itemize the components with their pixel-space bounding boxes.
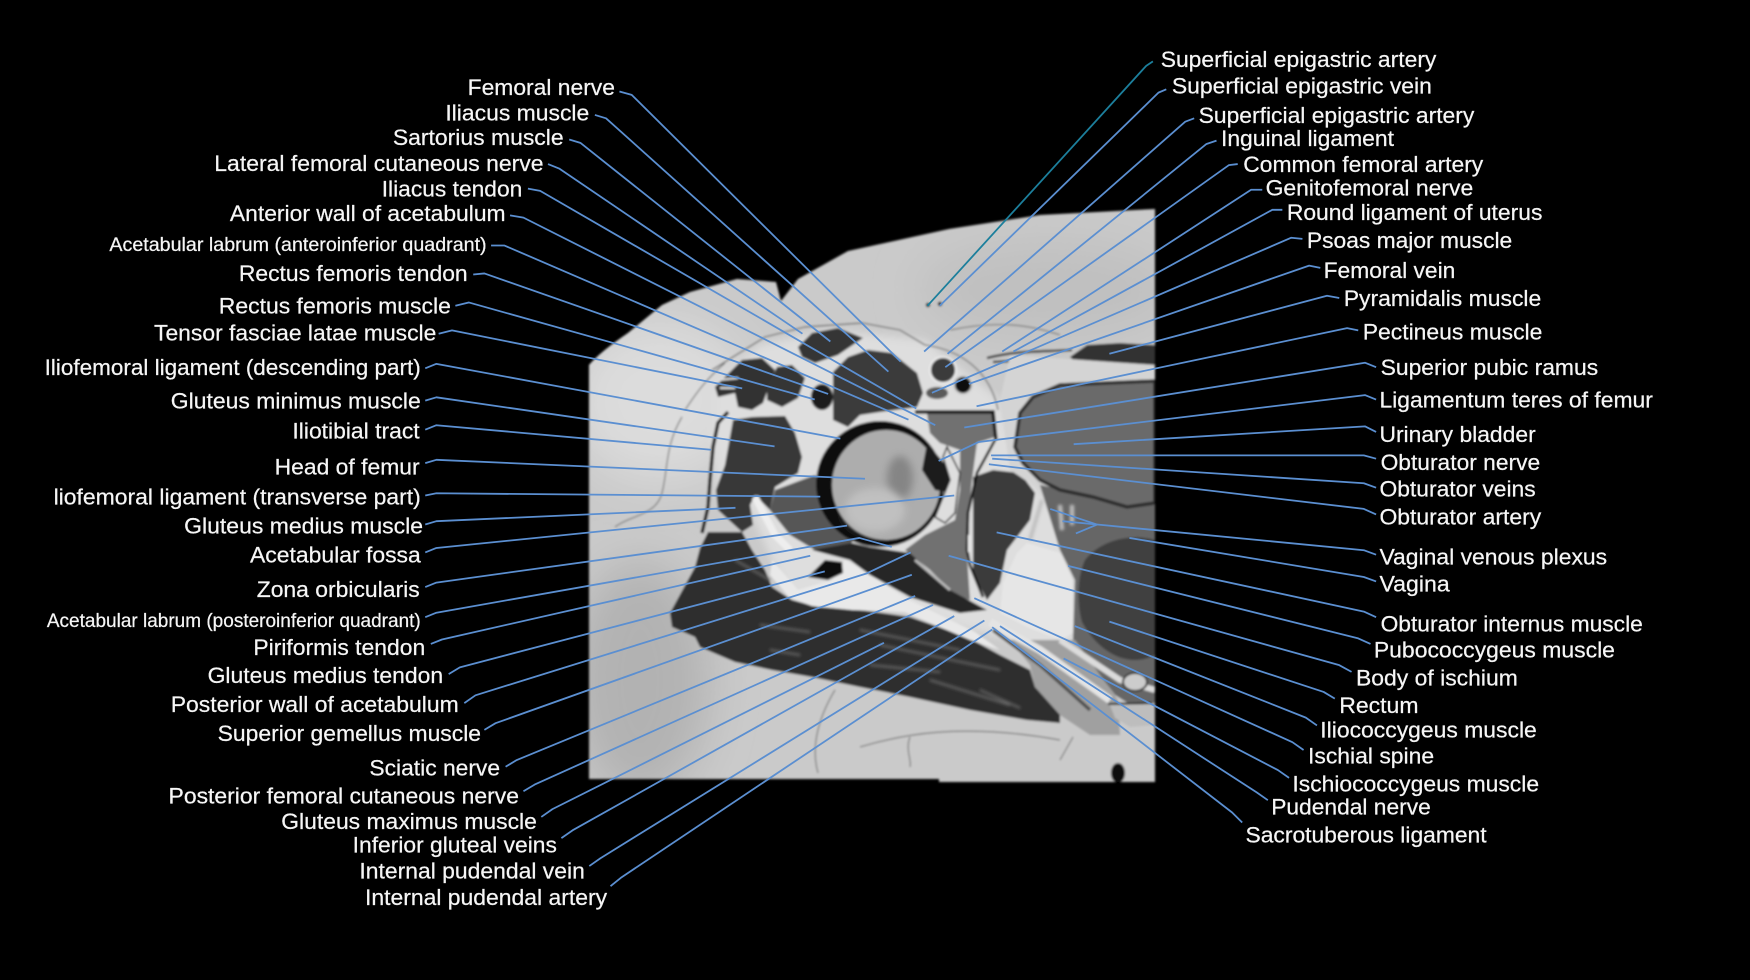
pelvic floor tissue — [1040, 485, 1155, 720]
label: Rectum — [1109, 622, 1419, 718]
label: Iliotibial tract — [292, 419, 711, 450]
label: Sciatic nerve — [369, 596, 915, 781]
leader: superficial epigastric artery (teal) — [927, 47, 1437, 306]
pyramidalis muscle — [1070, 343, 1155, 365]
label: Acetabular labrum (anteroinferior quadrant) — [109, 235, 908, 420]
label: Pudendal nerve: Pudendal nerve — [1271, 795, 1431, 820]
label: Rectus femoris tendon: Rectus femoris tendon — [239, 261, 468, 286]
label: Sacrotuberous ligament: Sacrotuberous ligament — [1246, 823, 1487, 848]
urinary bladder — [1015, 381, 1155, 507]
label: Rectum: Rectum — [1339, 693, 1419, 718]
label: Inguinal ligament — [948, 126, 1395, 354]
white fat band behind rotators — [770, 560, 1000, 650]
label: Internal pudendal vein — [359, 621, 984, 883]
label: Femoral vein — [969, 258, 1455, 384]
leader: superficial epigastric artery (teal): Superficial epigastric artery — [1161, 47, 1437, 72]
label: Common femoral artery: Common femoral artery — [1243, 152, 1484, 177]
label: Lateral femoral cutaneous nerve: Lateral femoral cutaneous nerve — [214, 151, 544, 176]
gluteus medius and maximus mass — [670, 532, 1060, 723]
label: Pectineus muscle — [977, 319, 1542, 406]
label: Inguinal ligament: Inguinal ligament — [1221, 126, 1395, 151]
label: Gluteus maximus muscle — [281, 643, 884, 834]
label: Psoas major muscle — [932, 228, 1512, 393]
label: Superficial epigastric vein: Superficial epigastric vein — [1172, 74, 1432, 99]
label: Internal pudendal artery: Internal pudendal artery — [365, 885, 608, 910]
vaginal plexus bright streaks — [1030, 500, 1072, 540]
label: Ligamentum teres of femur — [939, 387, 1653, 461]
femoral vessels — [930, 357, 956, 383]
label: Pyramidalis muscle — [1109, 286, 1541, 354]
label: Acetabular labrum (posteroinferior quadrant) — [47, 538, 892, 632]
label: Superficial epigastric artery (2) — [924, 103, 1475, 352]
label: Vagina: Vagina — [1379, 572, 1450, 597]
label: Internal pudendal artery — [365, 629, 992, 910]
label: Pubococcygeus muscle — [1068, 566, 1615, 662]
label: Obturator nerve — [991, 450, 1540, 475]
label: Sartorius muscle — [393, 125, 830, 342]
label: liofemoral ligament (transverse part): liofemoral ligament (transverse part) — [54, 484, 421, 509]
label: Obturator internus muscle: Obturator internus muscle — [1381, 612, 1643, 637]
label: Head of femur — [275, 454, 865, 479]
label: Posterior femoral cutaneous nerve: Posterior femoral cutaneous nerve — [169, 784, 519, 809]
label: Obturator artery — [989, 464, 1542, 530]
label: Femoral nerve: Femoral nerve — [468, 75, 615, 100]
label: Superficial epigastric vein — [940, 74, 1432, 306]
label: Gluteus medius tendon — [208, 571, 825, 688]
label: Iliacus tendon: Iliacus tendon — [382, 176, 522, 201]
label: Superficial epigastric artery (2): Superficial epigastric artery — [1199, 103, 1475, 128]
label: Gluteus maximus muscle: Gluteus maximus muscle — [281, 809, 537, 834]
label: Acetabular fossa — [250, 496, 954, 567]
label: Tensor fasciae latae muscle: Tensor fasciae latae muscle — [154, 320, 436, 345]
label: Sciatic nerve: Sciatic nerve — [369, 756, 500, 781]
label: Ligamentum teres of femur: Ligamentum teres of femur — [1379, 387, 1653, 412]
ischioanal fat — [1062, 564, 1074, 635]
label: Obturator artery: Obturator artery — [1379, 505, 1542, 530]
label: Piriformis tendon: Piriformis tendon — [253, 635, 425, 660]
rectum — [1078, 537, 1155, 660]
iliopsoas muscle — [833, 350, 923, 427]
label: Pubococcygeus muscle: Pubococcygeus muscle — [1374, 637, 1615, 662]
sartorius muscle — [798, 328, 863, 363]
label: Sacrotuberous ligament — [992, 627, 1487, 848]
label: Vaginal venous plexus: Vaginal venous plexus — [1379, 545, 1607, 570]
label: Anterior wall of acetabulum: Anterior wall of acetabulum — [230, 201, 506, 226]
label: Round ligament of uterus — [1013, 200, 1542, 352]
label: Acetabular labrum (posteroinferior quadrant): Acetabular labrum (posteroinferior quadrant) — [47, 611, 421, 632]
label: Inferior gluteal veins: Inferior gluteal veins — [353, 833, 557, 858]
label: Obturator veins — [992, 459, 1536, 502]
bright perimuscular fat — [716, 332, 1074, 640]
label: Anterior wall of acetabulum — [230, 201, 935, 425]
label: Internal pudendal vein: Internal pudendal vein — [359, 858, 585, 883]
label: Rectus femoris muscle — [219, 294, 815, 400]
label: Superior pubic ramus: Superior pubic ramus — [1381, 355, 1598, 380]
label: Pectineus muscle: Pectineus muscle — [1363, 319, 1542, 344]
label: Gluteus medius muscle — [184, 508, 735, 538]
perivesical fat — [1000, 355, 1155, 490]
label: Inferior gluteal veins — [353, 616, 954, 858]
label: Ischiococcygeus muscle — [1064, 658, 1539, 796]
label: Body of ischium: Body of ischium — [1356, 665, 1518, 690]
label: Sartorius muscle: Sartorius muscle — [393, 125, 564, 150]
label: Lateral femoral cutaneous nerve — [214, 151, 802, 334]
fat septa — [615, 325, 1073, 773]
label: Obturator veins: Obturator veins — [1379, 477, 1536, 502]
muscle fibre streaks — [735, 560, 1020, 708]
bright crescent of acetabular fossa fat — [935, 447, 960, 523]
label: Body of ischium — [949, 556, 1518, 690]
label: Gluteus minimus muscle — [171, 388, 775, 446]
label: Acetabular fossa: Acetabular fossa — [250, 542, 421, 567]
label: Superior pubic ramus — [964, 355, 1598, 427]
femoral head with dark ring — [816, 421, 944, 547]
label: liofemoral ligament (transverse part) — [54, 484, 820, 509]
label: Femoral nerve — [468, 75, 901, 362]
label: Superior gemellus muscle — [218, 575, 912, 746]
label: Posterior wall of acetabulum: Posterior wall of acetabulum — [171, 692, 459, 717]
MRI scan: axial hip — [587, 208, 1157, 784]
sacrotuberous bands — [1010, 640, 1120, 735]
label: Iliacus muscle: Iliacus muscle — [445, 101, 589, 126]
label: Urinary bladder — [1074, 422, 1536, 447]
label: Iliococcygeus muscle: Iliococcygeus muscle — [1320, 718, 1537, 743]
label: Vaginal venous plexus — [1050, 509, 1607, 570]
anal region — [1110, 703, 1155, 727]
label: Vagina — [1129, 538, 1450, 597]
subcutaneous fat — [580, 200, 1160, 790]
obturator internus — [973, 470, 1035, 600]
label: Posterior wall of acetabulum — [171, 552, 911, 717]
label: Piriformis tendon — [253, 556, 810, 660]
label: Iliotibial tract: Iliotibial tract — [292, 419, 420, 444]
gluteus minimus block — [716, 416, 802, 532]
label: Obturator internus muscle — [997, 532, 1643, 637]
label: Zona orbicularis — [257, 526, 847, 602]
label: Iliacus tendon — [382, 176, 916, 408]
label: Rectus femoris muscle: Rectus femoris muscle — [219, 294, 451, 319]
label: Gluteus medius muscle: Gluteus medius muscle — [184, 513, 423, 538]
label: Superior gemellus muscle: Superior gemellus muscle — [218, 721, 481, 746]
label: Rectus femoris tendon — [239, 261, 828, 394]
label: Pudendal nerve — [1000, 626, 1431, 820]
tensor fasciae latae, medial lobe — [767, 365, 805, 407]
sciatic and gemellus group — [812, 543, 987, 613]
label: Iliococcygeus muscle — [1075, 626, 1537, 743]
label: Ischial spine: Ischial spine — [1308, 743, 1434, 768]
label: Tensor fasciae latae muscle — [154, 320, 742, 388]
rectus femoris tendon — [811, 384, 833, 410]
dark spot near skin — [1111, 763, 1125, 783]
label: Head of femur: Head of femur — [275, 454, 420, 479]
label: Genitofemoral nerve: Genitofemoral nerve — [1266, 175, 1473, 200]
label: Acetabular labrum (anteroinferior quadrant): Acetabular labrum (anteroinferior quadrant) — [109, 235, 487, 256]
label: Gluteus minimus muscle: Gluteus minimus muscle — [171, 388, 421, 413]
cortical line of ischium — [967, 440, 995, 597]
label: Femoral vein: Femoral vein — [1324, 258, 1455, 283]
label: Pyramidalis muscle: Pyramidalis muscle — [1344, 286, 1541, 311]
gluteus medius tendon blob — [808, 560, 843, 580]
label: Psoas major muscle: Psoas major muscle — [1307, 228, 1512, 253]
fascia arc — [712, 323, 925, 370]
label: Common femoral artery — [945, 152, 1484, 367]
superficial epigastric vessels — [926, 303, 930, 307]
tensor fasciae latae, lateral lobe — [715, 358, 775, 410]
label: Posterior femoral cutaneous nerve — [169, 605, 933, 809]
label: Genitofemoral nerve — [1002, 175, 1473, 352]
mid-gray periarticular tissue — [770, 475, 860, 550]
label: Iliofemoral ligament (descending part): Iliofemoral ligament (descending part) — [45, 355, 421, 380]
label: Iliacus muscle — [445, 101, 888, 372]
label: Ischial spine — [974, 598, 1434, 768]
label: Urinary bladder: Urinary bladder — [1379, 422, 1536, 447]
label: Gluteus medius tendon: Gluteus medius tendon — [208, 663, 443, 688]
label: Iliofemoral ligament (descending part) — [45, 355, 840, 439]
label: Ischiococcygeus muscle: Ischiococcygeus muscle — [1292, 771, 1539, 796]
label: Round ligament of uterus: Round ligament of uterus — [1287, 200, 1542, 225]
label: Zona orbicularis: Zona orbicularis — [257, 577, 420, 602]
label: Obturator nerve: Obturator nerve — [1381, 450, 1540, 475]
iliotibial tract — [702, 412, 728, 533]
acetabulum and ischial column — [905, 413, 995, 600]
